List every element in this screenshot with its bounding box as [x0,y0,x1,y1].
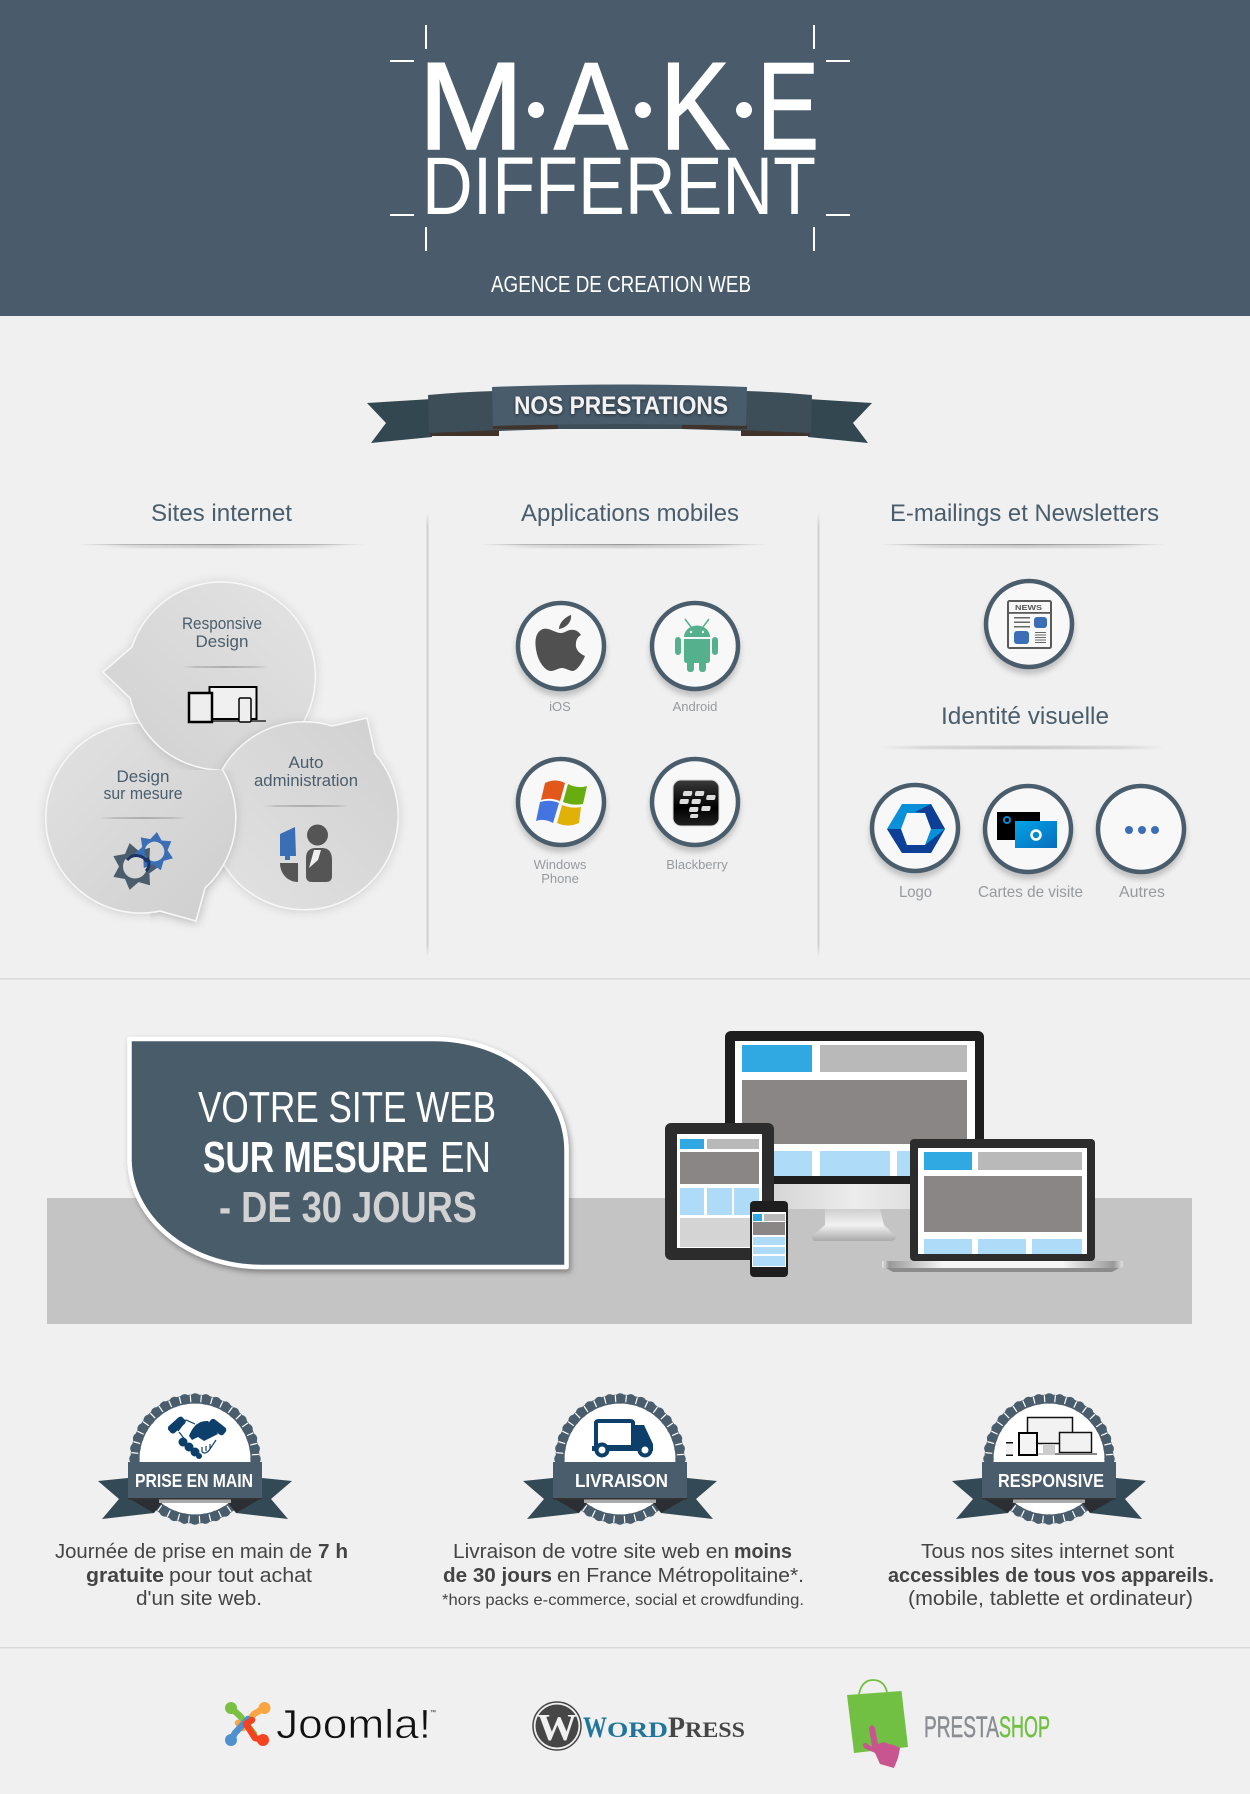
icon: handshake [167,1415,228,1459]
icon: newspaper: NEWS [1015,603,1042,612]
panel: responsive [888,1398,1214,1610]
tablet [665,1123,774,1260]
icon: person [280,824,332,882]
callout: votre site web: EN [440,1134,491,1182]
panel: livraison [442,1398,804,1609]
text: responsive: (mobile, tablette et ordinateur) [908,1587,1193,1610]
logo: MAKE DIFFERENT: A [554,38,628,176]
logo: prestashop: SHOP [999,1711,1050,1744]
heading: identité visuelle: Identité visuelle [941,703,1109,730]
grey table band [47,1198,1192,1324]
icon: autres: Autres [1119,884,1165,901]
icon: Blackberry [652,759,738,872]
text: livraison: Livraison de votre site web en [453,1540,729,1563]
icon: Blackberry: Blackberry [666,857,728,872]
logo: wordpress: W [537,1707,577,1749]
heading: applications mobiles: Applications mobiles [521,500,739,527]
panel: sites internet [46,500,398,921]
bubble: auto administration [254,753,358,882]
bubble: responsive design [182,614,268,722]
logo: MAKE DIFFERENT: E [757,38,819,176]
ribbon: nos prestations: NOS PRESTATIONS [514,392,728,420]
logo: prestashop [847,1680,1050,1768]
bubble: design sur mesure: sur mesure [104,784,182,803]
logo: MAKE DIFFERENT: K [660,38,730,176]
logo: joomla: ™ [430,1709,436,1716]
icon: devices [189,687,266,722]
icon: mini devices [1006,1418,1097,1456]
text: prise en main: gratuite [86,1564,164,1587]
icon: logo: Logo [899,884,932,901]
logo: prestashop: PRESTA [924,1711,999,1744]
icon: cartes de visite [978,786,1083,901]
heading: e-mailings et newsletters: E-mailings et Newsletters [890,500,1159,527]
logo: joomla [225,1701,436,1747]
text: responsive: Tous nos sites internet sont [921,1540,1174,1563]
icon: truck [592,1421,653,1456]
ribbon: nos prestations [367,384,872,443]
logo: joomla: Joomla! [276,1701,431,1747]
callout: votre site web: - DE 30 JOURS [219,1184,477,1232]
logo: MAKE DIFFERENT: DIFFERENT [422,141,816,232]
phone [750,1201,788,1277]
bubble: design sur mesure [100,767,186,890]
text: livraison: de 30 jours [443,1564,552,1587]
column dividers [0,513,1250,1648]
callout: votre site web: SUR MESURE [203,1134,428,1182]
callout: votre site web [130,1039,566,1267]
icon: Android: Android [673,699,717,714]
icon: autres [1098,786,1184,901]
icon: Android [652,603,738,714]
icon: Windows Phone: Phone [541,871,579,886]
badge: responsive [952,1398,1146,1520]
icon: logo [872,785,958,901]
text: prise en main: d'un site web. [136,1587,262,1610]
panel: prise en main [55,1398,348,1610]
text: responsive: accessibles de tous vos appareils. [888,1564,1214,1587]
bubble: auto administration: administration [254,771,358,790]
header band [0,0,1250,316]
badge: livraison [523,1398,717,1520]
icon: newspaper [986,581,1072,667]
monitor [725,1031,984,1241]
venn of speech bubbles [46,582,398,921]
text: livraison: *hors packs e-commerce, social et crowdfunding. [442,1592,804,1609]
callout: votre site web: VOTRE SITE WEB [198,1084,496,1132]
logo: wordpress: P [668,1711,685,1744]
text: prise en main: 7 h [318,1540,348,1563]
text: livraison [442,1540,804,1609]
text: prise en main: Journée de prise en main de [55,1540,312,1563]
badge: responsive: RESPONSIVE [998,1471,1104,1491]
panel: identité visuelle [872,703,1184,901]
icon: cartes de visite: Cartes de visite [978,884,1083,901]
icon: Windows Phone: Windows [534,857,587,872]
badge: livraison: LIVRAISON [575,1471,668,1491]
heading: sites internet: Sites internet [151,500,292,527]
text: livraison: moins [734,1540,792,1563]
laptop [882,1139,1123,1272]
logo: wordpress [533,1702,745,1750]
text: livraison: en France Métropolitaine*. [557,1564,804,1587]
logo: wordpress: ORD [607,1717,668,1742]
icon: iOS [518,603,604,714]
icon: iOS: iOS [549,699,571,714]
bubble: design sur mesure: Design [117,767,169,786]
logo: wordpress: RESS [685,1717,745,1742]
bubble: auto administration: Auto [289,753,323,772]
text: prise en main [55,1540,348,1610]
panel: e-mailings [879,500,1166,667]
bubble: responsive design: Design [196,632,248,651]
panel: applications mobiles [479,500,767,886]
bubble: responsive design: Responsive [182,614,262,633]
text: responsive [888,1540,1214,1610]
badge: prise en main [98,1398,292,1520]
tagline: AGENCE DE CREATION WEB [491,271,751,297]
badge: prise en main: PRISE EN MAIN [135,1471,253,1491]
logo: wordpress: W [583,1711,607,1744]
icon: Windows Phone [518,759,604,886]
text: prise en main: pour tout achat [169,1564,312,1587]
illustration: responsive devices [665,1031,1123,1277]
logo: MAKE DIFFERENT: M [418,38,524,176]
icon: gears [113,827,180,890]
logo: MAKE DIFFERENT [390,25,850,251]
